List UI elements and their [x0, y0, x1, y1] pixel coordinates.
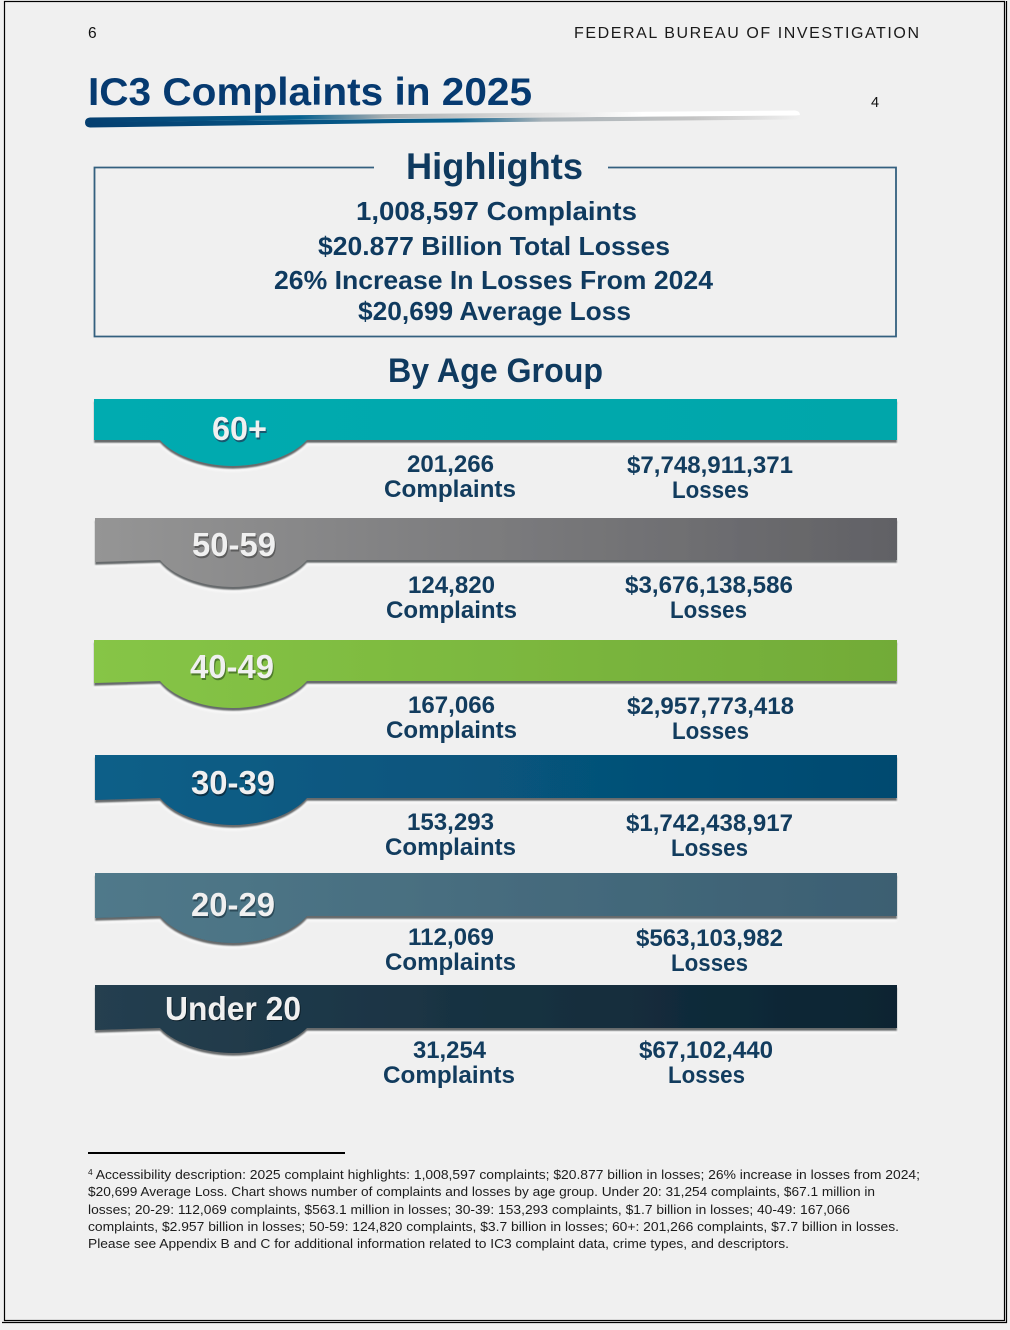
banner — [95, 985, 897, 1053]
age band: under 20: Losses — [668, 1062, 745, 1089]
stat: average loss: $20,699 Average Loss — [358, 296, 631, 326]
complaints: 167,066 — [408, 692, 495, 719]
losses: $563,103,982 — [636, 925, 783, 952]
heading: by age group: By Age Group — [388, 352, 603, 390]
age band: 50-59: Losses — [670, 597, 747, 624]
panel: highlights — [94, 146, 896, 336]
losses: $7,748,911,371 — [627, 452, 793, 479]
age band: 40-49: 40-49 — [190, 648, 274, 685]
banner — [95, 873, 897, 943]
label: 60+ — [213, 412, 268, 449]
age band: 20-29: 20-29 — [191, 886, 275, 923]
age band: 20-29 — [95, 873, 897, 977]
footnote text: complaints, $2.957 billion in losses; 50-59: 124,820 complaints, $3.7 billion in losses; 60+: 201,266 complaints, $7.7 billion in losses. — [88, 1219, 899, 1234]
footnote rule — [88, 1152, 345, 1154]
age band: 60+ — [94, 399, 897, 504]
complaints: 112,069 — [408, 924, 494, 951]
stat: complaints: 1,008,597 Complaints — [356, 196, 637, 226]
age band: 20-29: Losses — [671, 950, 748, 977]
age band: 30-39: Losses — [671, 835, 748, 862]
age band: 20-29: Complaints — [385, 949, 516, 976]
banner — [94, 640, 897, 708]
age band: 60+: Complaints — [384, 476, 516, 503]
footnote text: losses; 20-29: 112,069 complaints, $563.1 million in losses; 30-39: 153,293 complaints, $1.7 billion in losses; 40-49: 167,066 — [88, 1202, 850, 1217]
banner — [94, 399, 897, 466]
footnote marker: 4 — [871, 95, 879, 111]
losses: $3,676,138,586 — [625, 572, 793, 599]
footnote text: $20,699 Average Loss. Chart shows number of complaints and losses by age group. Under 20: 31,254 complaints, $67.1 million in — [88, 1184, 875, 1199]
footnote text: Accessibility description: 2025 complaint highlights: 1,008,597 complaints; $20.877 billion in losses; 26% increase in losses from 2024; — [93, 1167, 920, 1182]
age band: 60+: 60+ — [212, 410, 267, 447]
losses: $1,742,438,917 — [626, 810, 793, 837]
age band: 30-39: 30-39 — [191, 764, 275, 801]
highlights frame — [94, 168, 896, 336]
losses: $67,102,440 — [639, 1037, 773, 1064]
complaints: 31,254 — [413, 1037, 487, 1064]
footnote text: Please see Appendix B and C for additional information related to IC3 complaint data, crime types, and descriptors. — [88, 1236, 789, 1251]
age band: 40-49: Complaints — [386, 717, 517, 744]
label: 30-39 — [192, 766, 276, 803]
age band: 50-59: Complaints — [386, 597, 517, 624]
age band: 30-39: Complaints — [385, 834, 516, 861]
age band: under 20: Complaints — [383, 1062, 515, 1089]
age band: 60+: Losses — [672, 477, 749, 504]
title underline swoosh — [85, 110, 800, 128]
label: Under 20 — [166, 991, 302, 1028]
stat: total losses: $20.877 Billion Total Losses — [318, 231, 670, 261]
title: IC3 Complaints in 2025 — [88, 71, 532, 114]
complaints: 153,293 — [407, 809, 494, 836]
label: 20-29 — [192, 888, 276, 925]
age band: 50-59 — [95, 518, 897, 624]
page number: 6 — [88, 25, 97, 42]
age band: under 20: Under 20 — [165, 990, 301, 1027]
age band: 40-49: Losses — [672, 718, 749, 745]
age band: 40-49 — [94, 640, 897, 745]
age band: 30-39 — [95, 755, 897, 862]
footnote text: 4 — [88, 1168, 93, 1177]
label: 50-59 — [193, 528, 277, 565]
running header: FEDERAL BUREAU OF INVESTIGATION — [574, 25, 919, 42]
highlights heading: Highlights — [406, 146, 583, 187]
footnote text — [88, 1167, 920, 1251]
label: 40-49 — [191, 650, 275, 687]
stat: increase: 26% Increase In Losses From 2024 — [274, 265, 714, 295]
banner — [95, 518, 897, 587]
complaints: 201,266 — [407, 451, 494, 478]
complaints: 124,820 — [408, 572, 495, 599]
age band: under 20 — [95, 985, 897, 1089]
losses: $2,957,773,418 — [627, 693, 794, 720]
age band: 50-59: 50-59 — [192, 526, 276, 563]
banner — [95, 755, 897, 825]
